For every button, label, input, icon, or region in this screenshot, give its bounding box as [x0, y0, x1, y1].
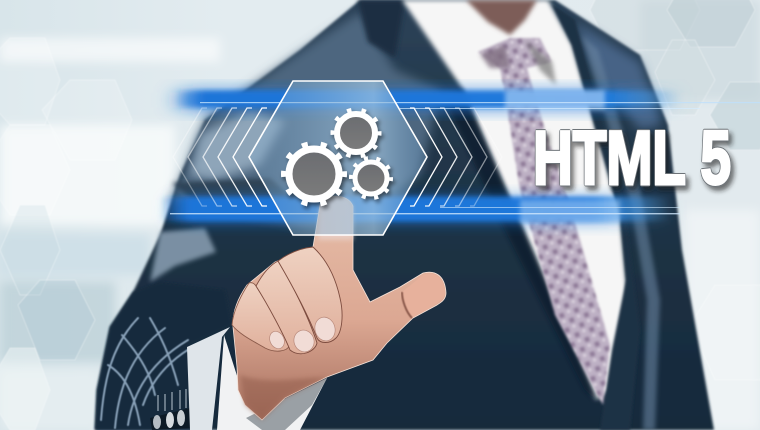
wrist shadow [240, 375, 327, 420]
collar shadow [358, 0, 405, 58]
left sleeve [95, 282, 232, 430]
lapel [552, 4, 640, 430]
index finger [278, 247, 342, 342]
nails [267, 315, 338, 355]
palm and index finger [233, 196, 446, 420]
large gear [284, 144, 344, 204]
tie [478, 38, 610, 405]
shirt cuff [187, 327, 327, 430]
neck [466, 0, 537, 35]
hand [232, 196, 446, 420]
sleeve buttons [150, 389, 192, 430]
hexagon interface [173, 81, 502, 235]
upper arm pale patch [190, 110, 285, 180]
right shoulder highlight [575, 22, 662, 130]
ring finger [232, 283, 290, 351]
small gear [351, 158, 391, 198]
left lapel fold [445, 88, 598, 402]
sleeve fold highlights [101, 318, 196, 428]
left chevrons [173, 108, 267, 206]
thumb tip [402, 274, 445, 318]
arm crease highlight [150, 228, 216, 282]
gears icon [284, 110, 391, 204]
middle finger [256, 261, 317, 354]
blurred shoulder and upper arm mid-tone [170, 12, 440, 225]
top gear [332, 110, 380, 156]
right chevrons [410, 108, 502, 206]
right lapel light edge [582, 35, 660, 430]
fingertip glow [318, 196, 353, 240]
arm dark fold [172, 178, 300, 206]
blue light bands [160, 90, 760, 222]
shirt [402, 0, 628, 400]
